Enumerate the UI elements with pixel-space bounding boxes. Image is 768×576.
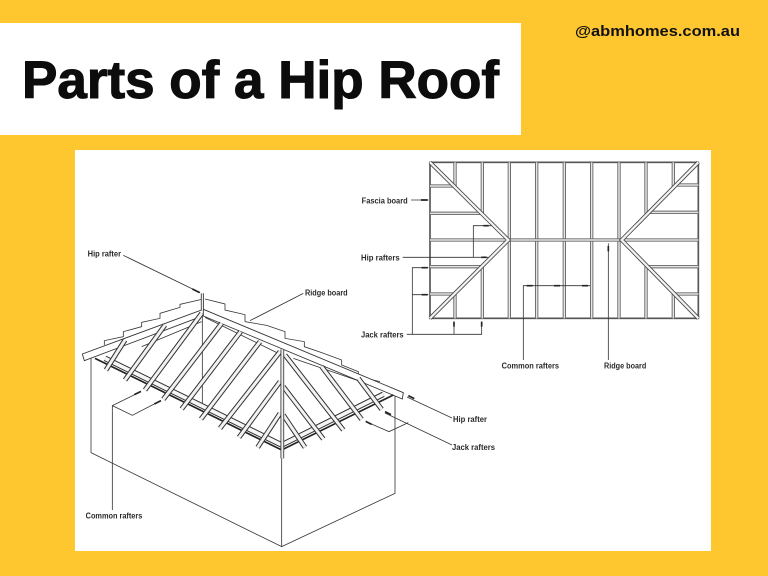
hip rafters	[430, 162, 698, 318]
callout: Ridge board	[607, 243, 610, 360]
common rafters	[509, 162, 619, 318]
label: Ridge board: Ridge board	[305, 289, 348, 298]
top hip rafter	[198, 293, 207, 310]
rear eave fascia right	[203, 309, 403, 399]
label: Ridge board: Ridge board	[604, 362, 646, 371]
arrow: Fascia board	[411, 199, 428, 201]
title banner	[0, 23, 521, 135]
arrow tips: plan	[421, 200, 608, 327]
rafters right slope	[283, 355, 382, 447]
label: Fascia board: Fascia board	[362, 196, 408, 205]
website handle: @abmhomes.com.au	[575, 24, 740, 40]
jack rafters	[430, 162, 698, 318]
label: Hip rafters: Hip rafters	[361, 253, 400, 262]
building walls	[91, 358, 395, 547]
ridge board	[430, 235, 698, 245]
callout: Common rafters	[523, 286, 590, 360]
eave board	[95, 358, 393, 450]
label: Common rafters: Common rafters	[86, 511, 143, 520]
callout: Hip rafters	[403, 226, 492, 257]
arrow tips: Common rafters	[134, 391, 161, 404]
callout: Jack rafters	[407, 268, 482, 334]
callout bracket: right jack rafters	[368, 423, 408, 432]
label: Jack rafters: Jack rafters	[361, 330, 404, 339]
common rafters front slope	[106, 313, 280, 447]
rear eave fascia left	[82, 309, 204, 361]
callout line: Hip rafter	[123, 255, 200, 293]
diagram panel	[75, 150, 711, 551]
callout line: Ridge board	[250, 293, 303, 321]
rear wall plate lines	[142, 317, 395, 393]
outer frame	[430, 162, 698, 318]
roof framing plan	[361, 162, 698, 371]
label: Hip rafter: Hip rafter	[88, 250, 121, 259]
title banner: Parts of a Hip Roof	[22, 51, 499, 110]
arrow tips: right side	[366, 396, 414, 424]
back stepped rafter ends	[104, 299, 380, 382]
isometric hip roof drawing	[82, 250, 414, 547]
callout lines: lower labels	[385, 397, 452, 445]
roof plane back wall line	[201, 313, 204, 403]
label: lower Jack rafters: Jack rafters	[452, 443, 496, 452]
label: lower Hip rafter: Hip rafter	[453, 415, 487, 424]
arrow tip: Hip rafter	[192, 289, 200, 293]
front hip rafter	[277, 349, 288, 458]
label: Common rafters: Common rafters	[502, 362, 560, 371]
callout line: Common rafters	[112, 392, 160, 510]
